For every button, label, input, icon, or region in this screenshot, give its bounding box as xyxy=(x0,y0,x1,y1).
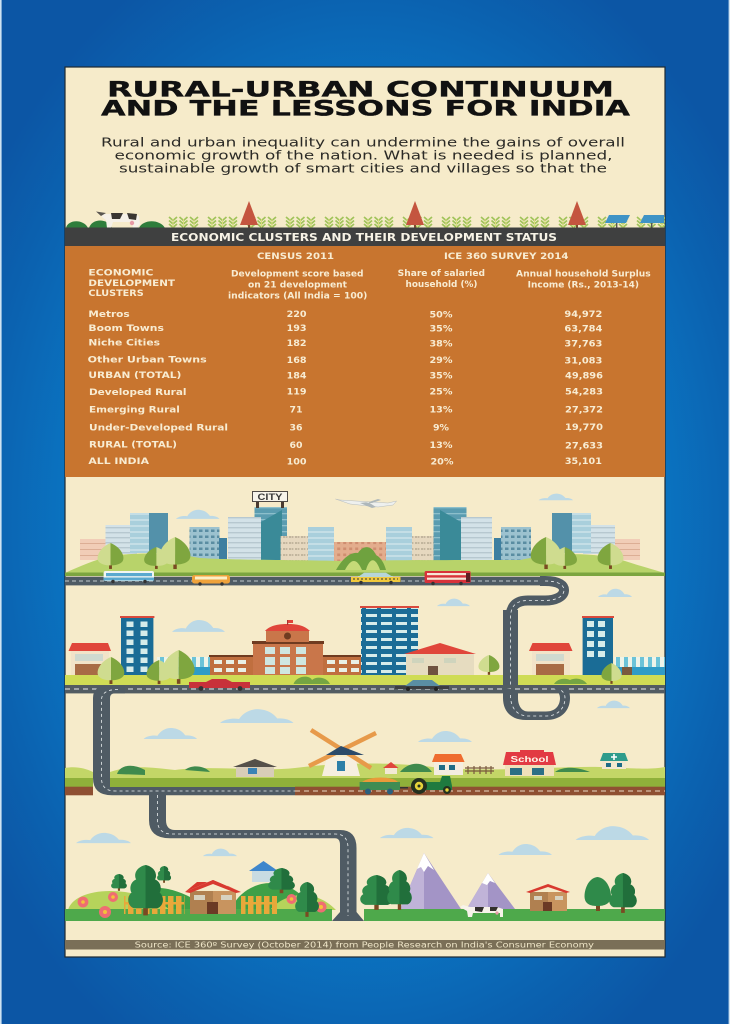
flowers xyxy=(78,892,326,918)
orange van xyxy=(192,575,230,586)
icon: tree 3 xyxy=(568,201,586,228)
table column: development score: 71 xyxy=(290,405,302,415)
intro paragraph: economic growth of the nation. What is needed is planned, xyxy=(114,148,612,162)
bus xyxy=(104,571,154,583)
ground xyxy=(65,909,332,921)
table column: surplus income: 63,784 xyxy=(564,324,602,334)
table column headers: Annual household Surplus xyxy=(516,270,651,280)
table column headers: CLUSTERS xyxy=(88,289,144,299)
table column: salaried share xyxy=(430,310,454,467)
table column headers: Share of salaried xyxy=(398,269,485,279)
awning shop right xyxy=(614,657,665,675)
double decker bus xyxy=(425,571,471,585)
bushes xyxy=(294,677,587,684)
section heading band: ECONOMIC CLUSTERS AND THEIR DEVELOPMENT STATUS xyxy=(171,231,557,244)
table column: surplus income: 27,633 xyxy=(565,441,603,451)
road: winding curve city to town xyxy=(510,581,564,690)
small houses xyxy=(383,754,465,775)
table column headers: ECONOMIC xyxy=(88,268,153,278)
table column headers: Income (Rs., 2013-14) xyxy=(528,281,639,291)
house centre xyxy=(404,643,476,675)
windmill xyxy=(309,730,376,776)
table row labels: URBAN (TOTAL) xyxy=(88,371,181,381)
table column: development score: 184 xyxy=(287,371,307,381)
table row labels xyxy=(88,310,228,467)
table column: surplus income: 94,972 xyxy=(564,310,602,320)
table column headers: DEVELOPMENT xyxy=(88,279,175,289)
awning shop left xyxy=(157,657,210,675)
city sign xyxy=(252,492,288,508)
farm house xyxy=(185,880,241,914)
table column: salaried share: 13% xyxy=(430,406,453,416)
centre hill xyxy=(336,547,386,570)
table column: development score: 60 xyxy=(290,441,302,451)
tree clusters xyxy=(117,764,590,775)
table column: surplus income: 19,770 xyxy=(565,423,603,433)
dirt road xyxy=(65,787,665,795)
icon: tree 2 xyxy=(406,201,424,228)
table column group headings: CENSUS 2011 xyxy=(257,252,334,262)
road: s-bend to countryside xyxy=(149,795,364,921)
town trees xyxy=(98,650,622,684)
table column: salaried share: 13% xyxy=(430,441,453,451)
table column: development score: 119 xyxy=(287,387,307,397)
table column: salaried share: 35% xyxy=(430,372,453,382)
table column: salaried share: 50% xyxy=(430,310,453,320)
city sign: CITY xyxy=(258,492,282,502)
road: town street xyxy=(65,685,665,693)
road: left descent xyxy=(93,685,295,795)
road: right loop xyxy=(503,685,570,720)
table column: surplus income xyxy=(564,310,603,467)
table column headers: Development score based xyxy=(231,270,364,280)
table column: surplus income: 49,896 xyxy=(565,372,603,382)
table row labels: Under-Developed Rural xyxy=(89,423,228,433)
fences xyxy=(124,896,277,914)
table row labels: ALL INDIA xyxy=(88,457,149,467)
title xyxy=(101,77,631,121)
house right xyxy=(529,643,572,675)
table column: development score: 220 xyxy=(287,310,307,320)
title: AND THE LESSONS FOR INDIA xyxy=(101,96,631,121)
table column: surplus income: 37,763 xyxy=(564,339,602,349)
school building brown xyxy=(209,620,362,675)
town ground xyxy=(65,675,503,685)
table column: surplus income: 54,283 xyxy=(565,387,603,397)
table column headers xyxy=(88,268,651,301)
intro paragraph: Rural and urban inequality can undermine the gains of overall xyxy=(101,134,625,150)
table row labels: Boom Towns xyxy=(88,324,164,334)
source band xyxy=(65,940,665,950)
city grass xyxy=(65,554,665,576)
title: RURAL-URBAN CONTINUUM xyxy=(107,77,614,102)
city buildings left xyxy=(80,507,334,563)
scene: city skyline xyxy=(65,492,665,586)
table column: development score: 36 xyxy=(290,423,302,433)
plane xyxy=(336,499,397,508)
source band: Source: ICE 360º Survey (October 2014) from People Research on India's Consumer Economy xyxy=(135,941,595,950)
table column headers: household (%) xyxy=(406,280,478,290)
table column headers: indicators (All India = 100) xyxy=(228,291,367,301)
table column headers: on 21 development xyxy=(248,281,347,291)
city buildings centre and right xyxy=(334,507,640,563)
table row labels: Developed Rural xyxy=(89,388,186,398)
right trees xyxy=(584,873,637,913)
table row labels: Other Urban Towns xyxy=(88,356,207,366)
table row labels: RURAL (TOTAL) xyxy=(89,441,177,451)
table column: salaried share: 38% xyxy=(430,339,453,349)
table column: surplus income: 31,083 xyxy=(564,356,602,366)
mountains xyxy=(400,853,515,909)
table column: development score: 182 xyxy=(287,339,307,349)
school xyxy=(503,750,556,776)
school: School xyxy=(510,754,548,764)
table row labels: Metros xyxy=(88,310,130,320)
house left xyxy=(68,643,111,675)
house left xyxy=(233,759,277,777)
city road xyxy=(65,577,547,585)
table column group headings xyxy=(257,252,568,262)
blue house on hill xyxy=(249,861,278,882)
small house xyxy=(526,884,570,911)
section heading band xyxy=(65,228,665,246)
panel: infographic poster xyxy=(65,67,665,957)
table column: surplus income: 35,101 xyxy=(565,457,602,467)
sedan car xyxy=(395,680,449,691)
table row labels: Niche Cities xyxy=(88,339,160,349)
pickup truck xyxy=(189,679,250,691)
icon: tree 1 xyxy=(240,201,258,228)
hills xyxy=(118,883,301,910)
intro paragraph: sustainable growth of smart cities and villages so that the xyxy=(119,160,607,176)
city trees xyxy=(98,537,623,569)
table column: development score: 168 xyxy=(287,356,307,366)
table column: salaried share: 20% xyxy=(430,457,454,467)
table column: surplus income: 27,372 xyxy=(565,405,603,415)
cow xyxy=(460,905,503,917)
tall blue building xyxy=(360,606,419,675)
table column: salaried share: 25% xyxy=(430,387,453,397)
table column: development score: 100 xyxy=(287,457,307,467)
table column group headings: ICE 360 SURVEY 2014 xyxy=(444,252,568,262)
village hills xyxy=(65,764,665,787)
tractor with trailer xyxy=(360,776,452,794)
icon: cow xyxy=(96,212,140,228)
clinic xyxy=(600,753,628,769)
scene: countryside xyxy=(65,826,665,921)
hillside trees xyxy=(111,865,412,917)
farm strip illustration xyxy=(66,201,665,228)
scene: town xyxy=(65,589,665,685)
blue building left xyxy=(120,616,154,675)
intro paragraph xyxy=(101,134,625,176)
table row labels: Emerging Rural xyxy=(89,405,180,415)
table column: salaried share: 9% xyxy=(433,424,449,434)
table column: salaried share: 29% xyxy=(430,356,453,366)
blue building right xyxy=(582,616,614,675)
taxi xyxy=(351,573,400,584)
table: economic clusters xyxy=(65,246,665,477)
table column: development score: 193 xyxy=(287,324,307,334)
scene: village xyxy=(65,701,665,795)
table column: development score xyxy=(287,310,307,467)
fence xyxy=(465,766,494,774)
table column: salaried share: 35% xyxy=(430,324,453,334)
icon: solar panels xyxy=(605,215,664,228)
